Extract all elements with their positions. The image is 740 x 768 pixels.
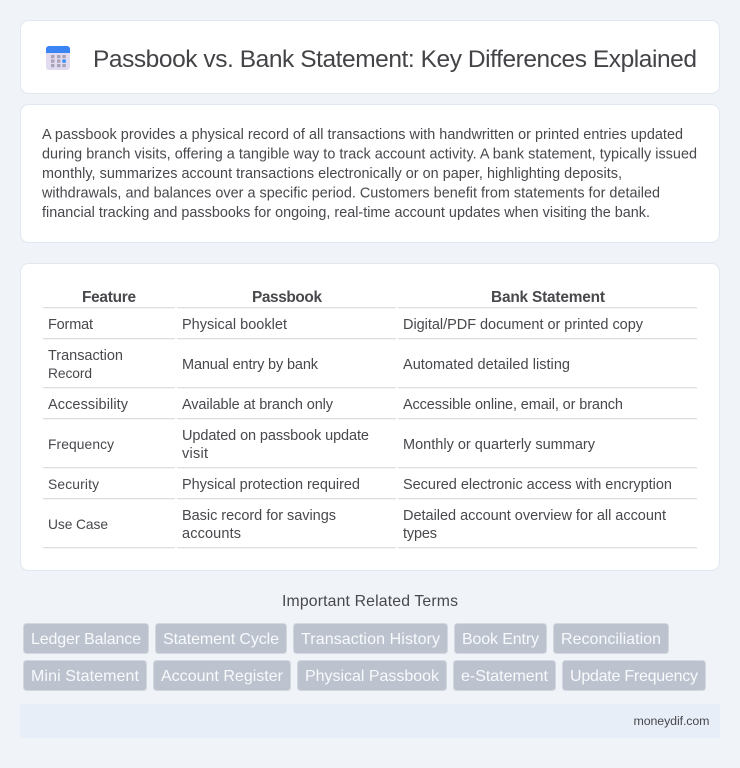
tag: statement cycle: Statement Cycle [163,631,279,648]
row: frequency: Monthly or quarterly summary [403,437,596,453]
text block: introduction paragraph: monthly, summarizes account transactions electronically or on paper, highlighting deposits, [42,166,622,182]
row: security: Security [48,477,99,492]
tag: physical passbook [298,660,446,690]
tag: mini statement [24,660,146,690]
row: use case: Basic record for savings [182,508,336,524]
table header row [82,289,605,306]
table header row: Feature [82,289,136,306]
tag: update frequency [562,660,706,690]
tag: ledger balance [24,624,148,654]
tags: related terms [24,624,706,690]
row: frequency: Updated on passbook update [182,428,369,444]
tag: transaction history [294,624,448,654]
tag: statement cycle [156,624,286,654]
text block: introduction paragraph: withdrawals, and balances over a specific period. Customers benefit from statements for detailed [41,186,660,202]
row: transaction record [48,348,570,381]
row: use case [48,508,666,542]
row: transaction record: Automated detailed listing [403,357,570,373]
panel: header [20,20,720,94]
icon: calendar [46,46,70,70]
footer source text: moneydif.com [634,714,710,728]
row: use case: Detailed account overview for all account [403,508,666,524]
row: security: Secured electronic access with encryption [403,477,672,493]
row: format: Physical booklet [182,317,287,333]
row: frequency [48,428,596,462]
table header row: Passbook [252,289,322,306]
row: transaction record: Manual entry by bank [182,357,319,373]
row: transaction record: Transaction [48,348,123,364]
tag: transaction history: Transaction History [301,631,440,648]
tag: reconciliation [554,624,668,654]
panel: comparison table [20,264,720,570]
text block: introduction paragraph: A passbook provides a physical record of all transactions with handwritten or printed entries updated [42,127,683,143]
text block: introduction paragraph: financial tracking and passbooks for ongoing, real-time account updates when visiting the bank. [42,205,650,221]
footer [20,704,720,738]
text block: introduction paragraph: during branch visits, offering a tangible way to track account activity. A bank statement, typically issued [42,146,697,162]
row: transaction record: Record [48,366,92,381]
tag: book entry: Book Entry [462,631,539,648]
row: security [48,477,672,493]
panel: introduction [20,104,720,242]
tag: update frequency: Update Frequency [570,668,698,685]
row: use case: Use Case [48,517,108,532]
tag: reconciliation: Reconciliation [561,631,661,648]
tag: mini statement: Mini Statement [31,668,140,685]
row: accessibility: Available at branch only [182,397,334,413]
heading: important related terms: Important Related Terms [282,593,458,610]
row: security: Physical protection required [182,477,360,493]
row: accessibility: Accessibility [48,397,129,413]
tag: account register: Account Register [161,668,284,685]
row: accessibility: Accessible online, email, or branch [403,397,623,413]
text block: introduction paragraph [41,127,697,221]
row: frequency: Frequency [48,437,114,452]
tag: account register [154,660,290,690]
tag: e-statement: e-Statement [461,668,549,685]
row: format [48,317,644,333]
row: frequency: visit [182,446,208,462]
row: use case: types [403,526,437,542]
tag: ledger balance: Ledger Balance [31,631,141,648]
table header row: Bank Statement [491,289,605,306]
row: format: Digital/PDF document or printed copy [403,317,644,333]
tag: physical passbook: Physical Passbook [305,668,440,685]
tag: book entry [454,624,546,654]
title: Passbook vs. Bank Statement: Key Differences Explained [93,46,697,73]
row: use case: accounts [182,526,241,542]
tag: e-statement [454,660,556,690]
row: format: Format [48,317,93,333]
row: accessibility [48,397,623,413]
